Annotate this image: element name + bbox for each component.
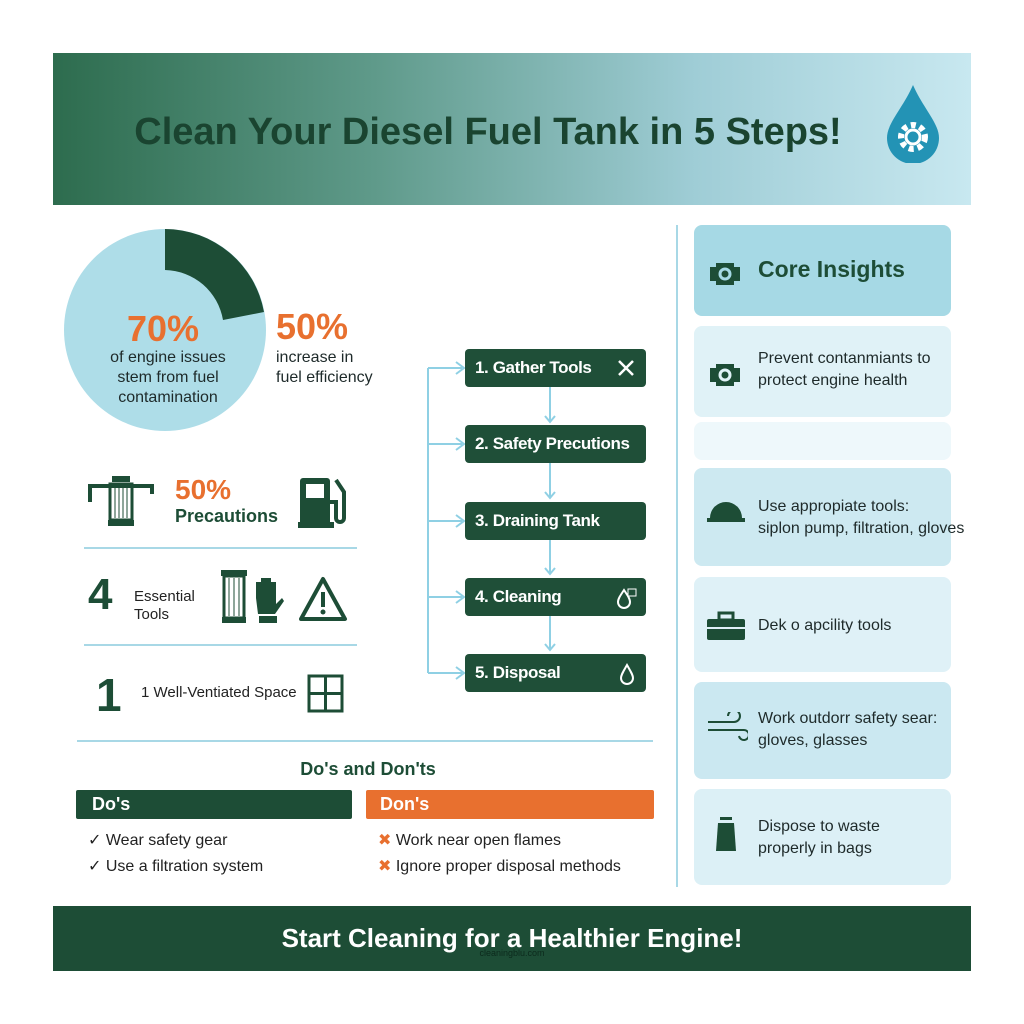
icon: window	[308, 674, 344, 712]
card: prevent contaminants: protect engine health	[758, 372, 907, 389]
do's panel: ✓ Wear safety gear	[88, 832, 227, 849]
row: ventilated space: 1	[96, 669, 122, 721]
step 4: 4. Cleaning	[475, 587, 561, 606]
row: essential tools: Essential	[134, 588, 195, 605]
title: Clean Your Diesel Fuel Tank in 5 Steps!	[134, 111, 842, 153]
stat: 50% efficiency: fuel efficiency	[276, 369, 373, 386]
heading: do's and don'ts: Do's and Don'ts	[300, 759, 436, 779]
card: tools	[694, 468, 951, 566]
footer banner: cleaningblu.com	[479, 948, 545, 958]
flow connector	[427, 361, 556, 680]
footer banner	[53, 906, 971, 971]
pie chart stat	[64, 229, 266, 431]
card: tools: siplon pump, filtration, gloves	[758, 520, 964, 537]
card: safety gear: Work outdorr safety sear:	[758, 710, 937, 727]
card: prevent contaminants: Prevent contanmiants to	[758, 350, 931, 367]
row: precautions	[88, 474, 346, 528]
row: essential tools: Tools	[134, 606, 169, 623]
icon: warning	[299, 576, 348, 621]
step 2: 2. Safety Precutions	[475, 434, 630, 453]
icon: drop with gear	[887, 85, 939, 163]
header banner	[53, 53, 971, 205]
stat: 50% efficiency: 50%	[276, 306, 348, 347]
stat: 50% efficiency: increase in	[276, 349, 353, 366]
row: essential tools: 4	[88, 570, 112, 619]
step 1: 1. Gather Tools	[475, 358, 592, 377]
row: ventilated space	[96, 669, 344, 721]
row: precautions: 50%	[175, 474, 231, 505]
stat: 50% efficiency	[276, 306, 373, 386]
footer banner: Start Cleaning for a Healthier Engine!	[282, 923, 742, 953]
card: disposal	[694, 789, 951, 885]
icon: fuel pump	[298, 478, 346, 528]
don'ts panel: Don's	[380, 794, 429, 814]
icon: glove	[256, 578, 284, 623]
card: safety gear: gloves, glasses	[758, 732, 867, 749]
pie chart stat: stem from fuel	[117, 369, 219, 386]
step 3: 3. Draining Tank	[475, 511, 600, 530]
icon: filter pipe	[88, 476, 154, 526]
don'ts panel: ✖ Ignore proper disposal methods	[378, 858, 621, 875]
step 3	[465, 502, 646, 540]
card: disposal: properly in bags	[758, 840, 872, 857]
step 5: 5. Disposal	[475, 663, 560, 682]
icon: filter	[221, 570, 247, 623]
card: disposal: Dispose to waste	[758, 818, 880, 835]
do's panel: ✓ Use a filtration system	[88, 858, 263, 875]
card: core insights header: Core Insights	[758, 256, 905, 282]
pie chart stat: 70%	[127, 308, 199, 349]
row: ventilated space: 1 Well-Ventiated Space	[141, 684, 297, 701]
row: precautions: Precautions	[175, 506, 278, 526]
card: toolbox: Dek o apcility tools	[758, 617, 891, 634]
card: core insights header	[694, 225, 951, 316]
step 1	[465, 349, 646, 387]
pie chart stat: of engine issues	[110, 349, 226, 366]
card: toolbox	[694, 577, 951, 672]
step 2	[465, 425, 646, 463]
step 5	[465, 654, 646, 692]
don'ts panel	[366, 790, 654, 875]
step 4	[465, 578, 646, 616]
card: prevent contaminants	[694, 326, 951, 417]
card: safety gear	[694, 682, 951, 779]
card: tools: Use appropiate tools:	[758, 498, 909, 515]
do's panel: Do's	[92, 794, 130, 814]
pie chart stat: contamination	[118, 389, 218, 406]
row: essential tools	[88, 570, 348, 623]
don'ts panel: ✖ Work near open flames	[378, 832, 561, 849]
do's panel	[76, 790, 352, 875]
